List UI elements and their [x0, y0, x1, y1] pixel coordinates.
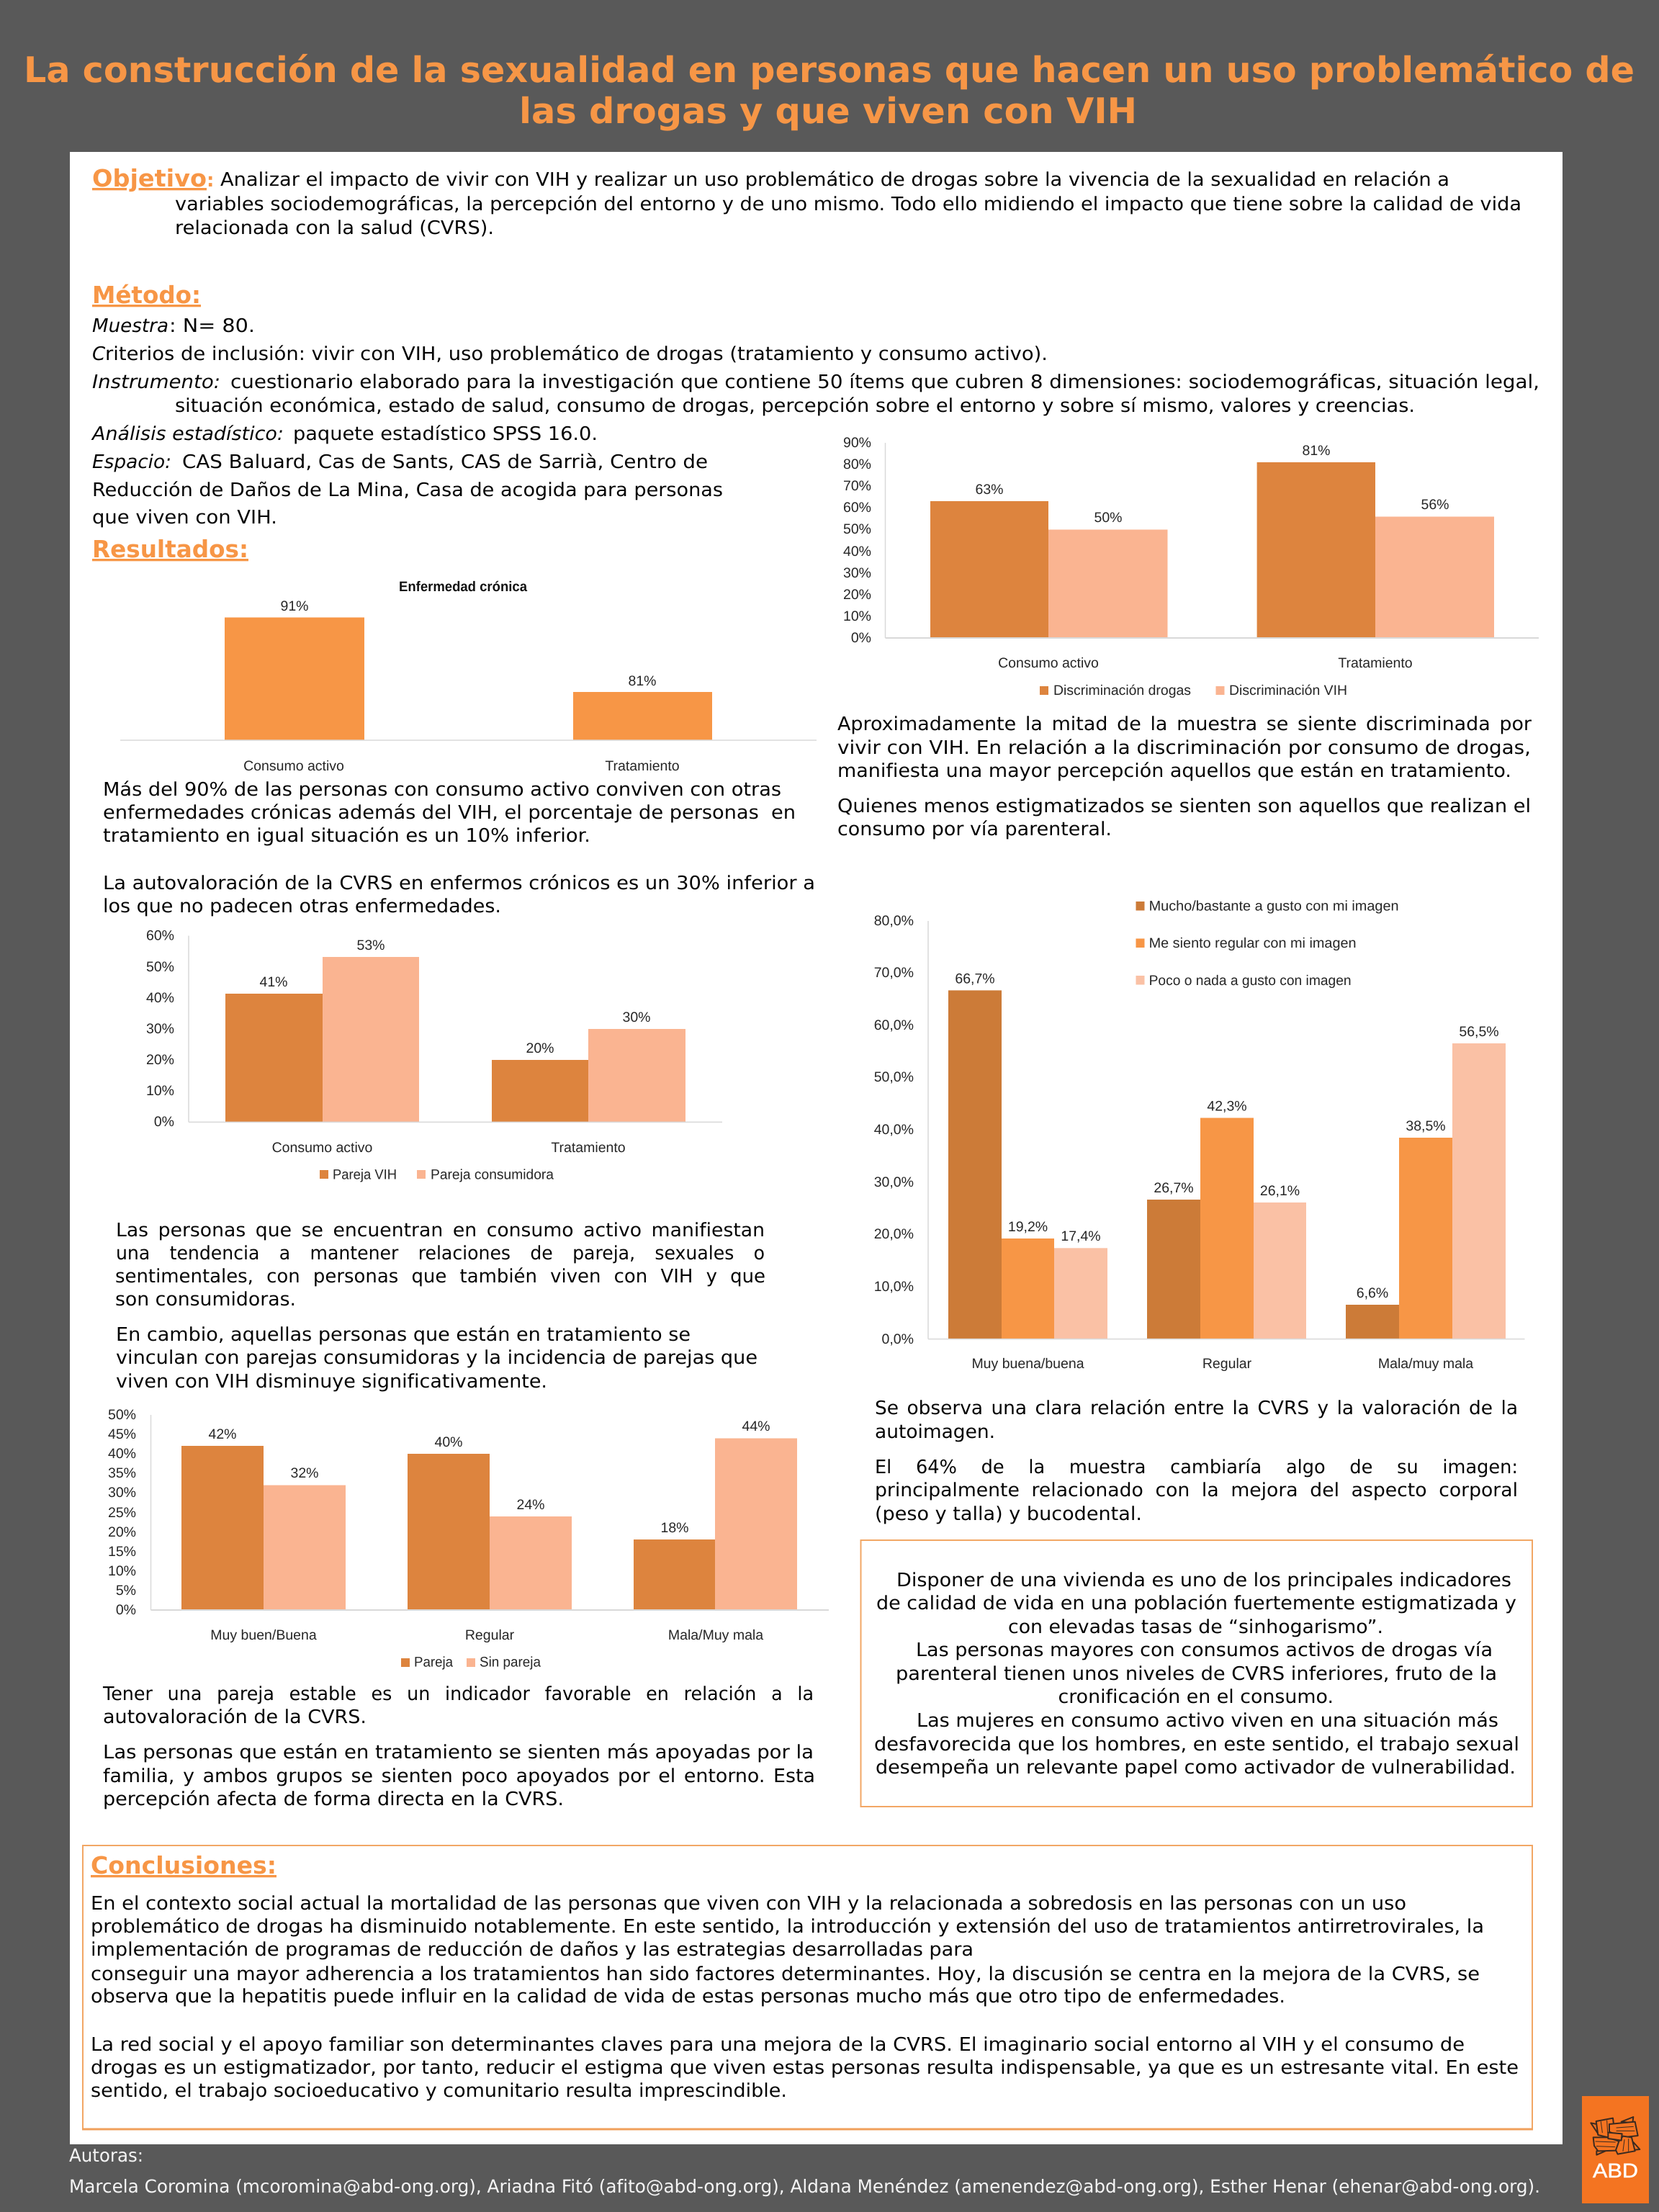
text block: discriminación — [837, 714, 1532, 840]
text block: relaciones de pareja: sentimentales, con personas que también viven con VIH y que — [115, 1266, 765, 1287]
legend: Me siento regular con mi imagen — [1149, 935, 1357, 951]
legend: Discriminación VIH — [1229, 683, 1347, 698]
axis ticks: 40% — [146, 990, 174, 1006]
text block: relaciones de pareja: viven con VIH disminuye significativamente. — [116, 1371, 547, 1393]
axis ticks: 90% — [843, 435, 871, 451]
text block: pareja estable: Las personas que están en tratamiento se sienten más apoyadas por la — [103, 1742, 814, 1763]
bar chart: pareja: Consumo activo — [272, 1140, 373, 1156]
text block: enfermedades crónicas — [103, 779, 815, 917]
text block: método: riterios de inclusión: vivir con VIH, uso problemático de drogas (tratamiento y consumo activo). — [105, 343, 1048, 365]
text: conclusiones: conseguir una mayor adherencia a los tratamientos han sido factores determinantes. Hoy, la discusión se centra en la mejora de la CVRS, se — [91, 1964, 1480, 1985]
value labels: 50% — [1094, 510, 1123, 526]
axis ticks — [843, 435, 871, 646]
text block: método: Instrumento: — [92, 372, 220, 393]
axis ticks: 70,0% — [874, 965, 914, 981]
axis ticks: 10,0% — [874, 1279, 914, 1295]
axis ticks: 10% — [843, 608, 871, 624]
legend: Poco o nada a gusto con imagen — [1149, 973, 1352, 989]
callout: vivienda: con elevadas tasas de “sinhogarismo”. — [1008, 1617, 1383, 1638]
axis ticks: 80% — [843, 457, 871, 472]
callout: vivienda: Las mujeres en consumo activo viven en una situación más — [917, 1710, 1498, 1732]
text block: método: CAS Baluard, Cas de Sants, CAS de Sarrià, Centro de — [182, 451, 708, 473]
axis ticks: 50% — [843, 521, 871, 537]
value labels: 18% — [660, 1520, 689, 1536]
section: objetivo: Analizar el impacto de vivir con VIH y realizar un uso problemático de drogas sobre la vivencia de la sexualidad en relación a — [220, 169, 1449, 191]
bar chart: pareja y CVRS: Mala/Muy mala — [668, 1627, 763, 1643]
text block: método: Espacio: — [92, 451, 171, 473]
legend — [320, 1166, 554, 1182]
callout: vivienda: de calidad de vida en una población fuertemente estigmatizada y — [876, 1593, 1516, 1614]
bars — [225, 957, 685, 1122]
text block: pareja estable: Tener una pareja estable es un indicador favorable en relación a la — [102, 1683, 814, 1705]
value labels — [975, 443, 1449, 526]
section: objetivo: relacionada con la salud (CVRS). — [175, 217, 494, 239]
bar chart: autoimagen y CVRS — [874, 899, 1525, 1372]
legend: Mucho/bastante a gusto con mi imagen — [1149, 899, 1399, 914]
value labels: 42% — [208, 1426, 237, 1442]
text block: discriminación: consumo por vía parenteral. — [837, 819, 1112, 840]
bars — [930, 462, 1494, 638]
axis ticks: 30% — [146, 1021, 174, 1037]
axis ticks — [874, 913, 914, 1347]
axis ticks: 40% — [843, 544, 871, 559]
text block: pareja estable: familia, y ambos grupos se sienten poco apoyados por el entorno. Esta — [103, 1766, 815, 1787]
axis ticks: 10% — [146, 1083, 174, 1099]
bar chart: autoimagen y CVRS: Muy buena/buena — [971, 1356, 1084, 1372]
text: conclusiones: problemático de drogas ha disminuido notablemente. En este sentido, la introducción y extensión del uso de tratamientos antirretrovirales, la — [91, 1916, 1484, 1938]
bar chart: enfermedad crónica: Consumo activo — [243, 758, 344, 774]
value labels: 63% — [975, 482, 1004, 498]
value labels: 32% — [290, 1465, 319, 1481]
axis ticks: 0,0% — [882, 1331, 914, 1347]
legend — [1136, 899, 1399, 989]
bar chart: enfermedad crónica — [120, 579, 817, 774]
text block: método: Muestra — [92, 315, 168, 337]
text block: pareja estable: percepción afecta de forma directa en la CVRS. — [103, 1789, 564, 1810]
legend — [1040, 683, 1347, 698]
axis ticks: 60% — [843, 500, 871, 516]
axis ticks: 70% — [843, 478, 871, 494]
callout: vivienda: Disponer de una vivienda es uno de los principales indicadores — [896, 1570, 1511, 1591]
axis ticks — [108, 1407, 136, 1618]
text block: autoimagen — [875, 1398, 1518, 1525]
text block: método: Reducción de Daños de La Mina, Casa de acogida para personas — [92, 480, 723, 501]
title: La construcción de la sexualidad en personas que hacen un uso problemático de — [24, 50, 1635, 91]
bar chart: pareja — [146, 927, 722, 1182]
bar chart: autoimagen y CVRS: Mala/muy mala — [1378, 1356, 1473, 1372]
section: objetivo: : — [207, 170, 214, 192]
text block: autoimagen: principalmente relacionado con la mejora del aspecto corporal — [875, 1480, 1518, 1501]
callout: vivienda: desfavorecida que los hombres, en este sentido, el trabajo sexual — [874, 1734, 1519, 1755]
text block: método: cuestionario elaborado para la investigación que contiene 50 ítems que cubren 8 dimensiones: sociodemográficas, situación legal, — [230, 372, 1539, 393]
heading: método: Método: — [92, 281, 201, 309]
value labels: 40% — [434, 1434, 463, 1450]
bar chart: pareja y CVRS: Regular — [465, 1627, 515, 1643]
callout: vivienda: cronificación en el consumo. — [1058, 1686, 1334, 1708]
text block: relaciones de pareja — [115, 1220, 765, 1393]
value labels: 19,2% — [1008, 1219, 1048, 1235]
text block: método: Análisis estadístico: — [91, 423, 284, 445]
text block: autoimagen: El 64% de la muestra cambiaría algo de su imagen: — [875, 1457, 1518, 1478]
axis ticks: 60,0% — [874, 1017, 914, 1033]
footer: autoras: Marcela Coromina (mcoromina@abd-ong.org), Ariadna Fitó (afito@abd-ong.org), Aldana Menéndez (amenendez@abd-ong.org), Esther Henar (ehenar@abd-ong.org). — [69, 2176, 1540, 2197]
logo: ABD: ABD — [1593, 2159, 1638, 2182]
axis ticks: 40,0% — [874, 1122, 914, 1138]
axis ticks: 20% — [146, 1052, 174, 1068]
bars — [181, 1439, 797, 1610]
axis ticks: 50% — [108, 1407, 136, 1423]
footer: autoras — [69, 2145, 1540, 2197]
heading: conclusiones: Conclusiones: — [91, 1851, 276, 1879]
legend — [401, 1655, 541, 1671]
axis ticks: 20% — [108, 1524, 136, 1540]
text block: enfermedades crónicas: tratamiento en igual situación es un 10% inferior. — [103, 825, 590, 847]
text block: método: : N= 80. — [169, 315, 255, 337]
bars — [948, 990, 1506, 1339]
axis ticks: 15% — [108, 1544, 136, 1560]
text block: método: paquete estadístico SPSS 16.0. — [293, 423, 598, 445]
icon: knot — [1591, 2117, 1640, 2155]
callout: vivienda — [861, 1540, 1532, 1807]
callout: vivienda: Las personas mayores con consumos activos de drogas vía — [916, 1640, 1493, 1661]
axis ticks: 40% — [108, 1446, 136, 1462]
value labels: 26,7% — [1154, 1180, 1194, 1196]
title: las drogas y que viven con VIH — [519, 91, 1137, 132]
text block: relaciones de pareja: son consumidoras. — [115, 1289, 296, 1310]
axis ticks — [146, 927, 174, 1130]
value labels: 38,5% — [1406, 1118, 1446, 1134]
axis ticks: 10% — [108, 1563, 136, 1579]
axis ticks: 30% — [843, 565, 871, 581]
text block: pareja estable: autovaloración de la CVRS. — [103, 1707, 367, 1728]
bar chart: enfermedad crónica: 91% — [280, 598, 309, 614]
text: conclusiones: implementación de programas de reducción de daños y las estrategias desarrolladas para — [91, 1939, 974, 1961]
text block: enfermedades crónicas: Más del 90% de las personas con consumo activo conviven con otras — [103, 779, 781, 801]
axis ticks: 60% — [146, 927, 174, 943]
text block: discriminación: manifiesta una mayor percepción aquellos que están en tratamiento. — [837, 760, 1511, 782]
text: conclusiones — [91, 1893, 1519, 2102]
footer: autoras: Autoras: — [69, 2145, 143, 2166]
bar chart: autoimagen y CVRS: Regular — [1202, 1356, 1252, 1372]
value labels: 53% — [356, 938, 385, 953]
axis ticks: 0% — [154, 1114, 174, 1130]
heading: resultados: Resultados: — [92, 535, 248, 563]
bar chart: enfermedad crónica: Enfermedad crónica — [399, 579, 527, 595]
text: conclusiones: drogas es un estigmatizador, por tanto, reducir el estigma que viven estas personas resulta indispensable, ya que es un estresante vital. En este — [91, 2057, 1519, 2079]
value labels: 24% — [516, 1497, 545, 1513]
value labels — [208, 1419, 770, 1536]
value labels: 26,1% — [1260, 1183, 1300, 1199]
value labels: 20% — [526, 1040, 554, 1056]
axis ticks: 20,0% — [874, 1226, 914, 1242]
text block: discriminación: Quienes menos estigmatizados se sienten son aquellos que realizan el — [837, 796, 1531, 817]
section: objetivo: Objetivo — [92, 164, 207, 192]
value labels: 30% — [622, 1010, 651, 1025]
bar chart: discriminación — [843, 435, 1539, 698]
value labels: 44% — [742, 1419, 770, 1434]
legend: Pareja — [414, 1655, 453, 1671]
callout: vivienda: parenteral tienen unos niveles de CVRS inferiores, fruto de la — [896, 1663, 1497, 1685]
bar chart: enfermedad crónica: 81% — [628, 673, 657, 689]
value labels — [955, 971, 1499, 1301]
text block: autoimagen: (peso y talla) y bucodental. — [875, 1503, 1142, 1525]
section: objetivo — [92, 164, 1521, 239]
axis ticks: 35% — [108, 1465, 136, 1481]
text: conclusiones: sentido, el trabajo socioeducativo y comunitario resulta imprescindible. — [91, 2080, 787, 2102]
axis ticks: 45% — [108, 1426, 136, 1442]
value labels: 66,7% — [955, 971, 995, 986]
legend: Pareja consumidora — [431, 1166, 554, 1182]
axis ticks: 0% — [116, 1602, 136, 1618]
text: conclusiones: En el contexto social actual la mortalidad de las personas que viven con VIH y la relacionada a sobredosis en las personas con un uso — [91, 1893, 1406, 1915]
value labels: 17,4% — [1061, 1228, 1101, 1244]
bar chart: discriminación: Consumo activo — [998, 655, 1099, 671]
value labels: 56,5% — [1459, 1024, 1499, 1040]
value labels: 81% — [1302, 443, 1331, 459]
text block: enfermedades crónicas: los que no padecen otras enfermedades. — [103, 896, 501, 917]
axis ticks: 30% — [108, 1485, 136, 1501]
text block: método: C — [92, 343, 106, 365]
callout: vivienda: desempeña un relevante papel como activador de vulnerabilidad. — [876, 1757, 1516, 1779]
text block: método: que viven con VIH. — [92, 507, 277, 529]
axis ticks: 0% — [851, 630, 871, 646]
value labels — [259, 938, 651, 1056]
text block: método: situación económica, estado de salud, consumo de drogas, percepción sobre el entorno y sobre sí mismo, valores y creencias. — [175, 395, 1415, 417]
axis ticks: 25% — [108, 1505, 136, 1521]
bar chart: enfermedad crónica: Tratamiento — [605, 758, 680, 774]
value labels: 41% — [259, 974, 288, 990]
text block: enfermedades crónicas: La autovaloración de la CVRS en enfermos crónicos es un 30% inferior a — [103, 873, 815, 894]
text block: discriminación: Aproximadamente la mitad de la muestra se siente discriminada por — [837, 714, 1532, 735]
bar chart: discriminación: Tratamiento — [1338, 655, 1413, 671]
text: conclusiones: observa que la hepatitis puede influir en la calidad de vida de estas personas mucho más que otro tipo de enfermedades. — [91, 1986, 1285, 2008]
text block: autoimagen: autoimagen. — [875, 1421, 995, 1443]
text block: discriminación: vivir con VIH. En relación a la discriminación por consumo de drogas, — [837, 737, 1531, 759]
legend: Discriminación drogas — [1053, 683, 1191, 698]
panel: conclusiones — [82, 1845, 1533, 2129]
bar chart: pareja y CVRS: Muy buen/Buena — [210, 1627, 317, 1643]
axis ticks: 50,0% — [874, 1069, 914, 1085]
text block: relaciones de pareja: Las personas que se encuentran en consumo activo manifiestan — [116, 1220, 765, 1241]
axis ticks: 50% — [146, 959, 174, 975]
axis ticks: 30,0% — [874, 1174, 914, 1190]
bar chart: pareja: Tratamiento — [551, 1140, 626, 1156]
text block: relaciones de pareja: una tendencia a mantener relaciones de pareja, sexuales o — [116, 1243, 765, 1264]
legend: Sin pareja — [480, 1655, 541, 1671]
logo: ABD — [1582, 2096, 1649, 2203]
text block: relaciones de pareja: En cambio, aquellas personas que están en tratamiento se — [116, 1324, 691, 1346]
title — [24, 50, 1635, 132]
section: objetivo: variables sociodemográficas, la percepción del entorno y de uno mismo. Todo ello midiendo el impacto que tiene sobre la calidad de vida — [175, 194, 1521, 215]
text block: método — [91, 315, 1539, 529]
text block: relaciones de pareja: vinculan con parejas consumidoras y la incidencia de parejas que — [116, 1347, 757, 1369]
value labels: 42,3% — [1207, 1099, 1247, 1115]
value labels: 56% — [1421, 497, 1449, 513]
axis ticks: 80,0% — [874, 913, 914, 929]
bar chart: pareja y CVRS — [108, 1407, 829, 1671]
axis ticks: 5% — [116, 1583, 136, 1599]
value labels: 6,6% — [1357, 1285, 1388, 1301]
axis ticks: 20% — [843, 587, 871, 603]
text block: enfermedades crónicas: enfermedades crónicas además del VIH, el porcentaje de personas en — [103, 802, 796, 824]
text block: pareja estable — [102, 1683, 815, 1810]
legend: Pareja VIH — [333, 1166, 397, 1182]
text block: autoimagen: Se observa una clara relación entre la CVRS y la valoración de la — [875, 1398, 1518, 1419]
text: conclusiones: La red social y el apoyo familiar son determinantes claves para una mejora de la CVRS. El imaginario social entorno al VIH y el consumo de — [91, 2034, 1465, 2056]
